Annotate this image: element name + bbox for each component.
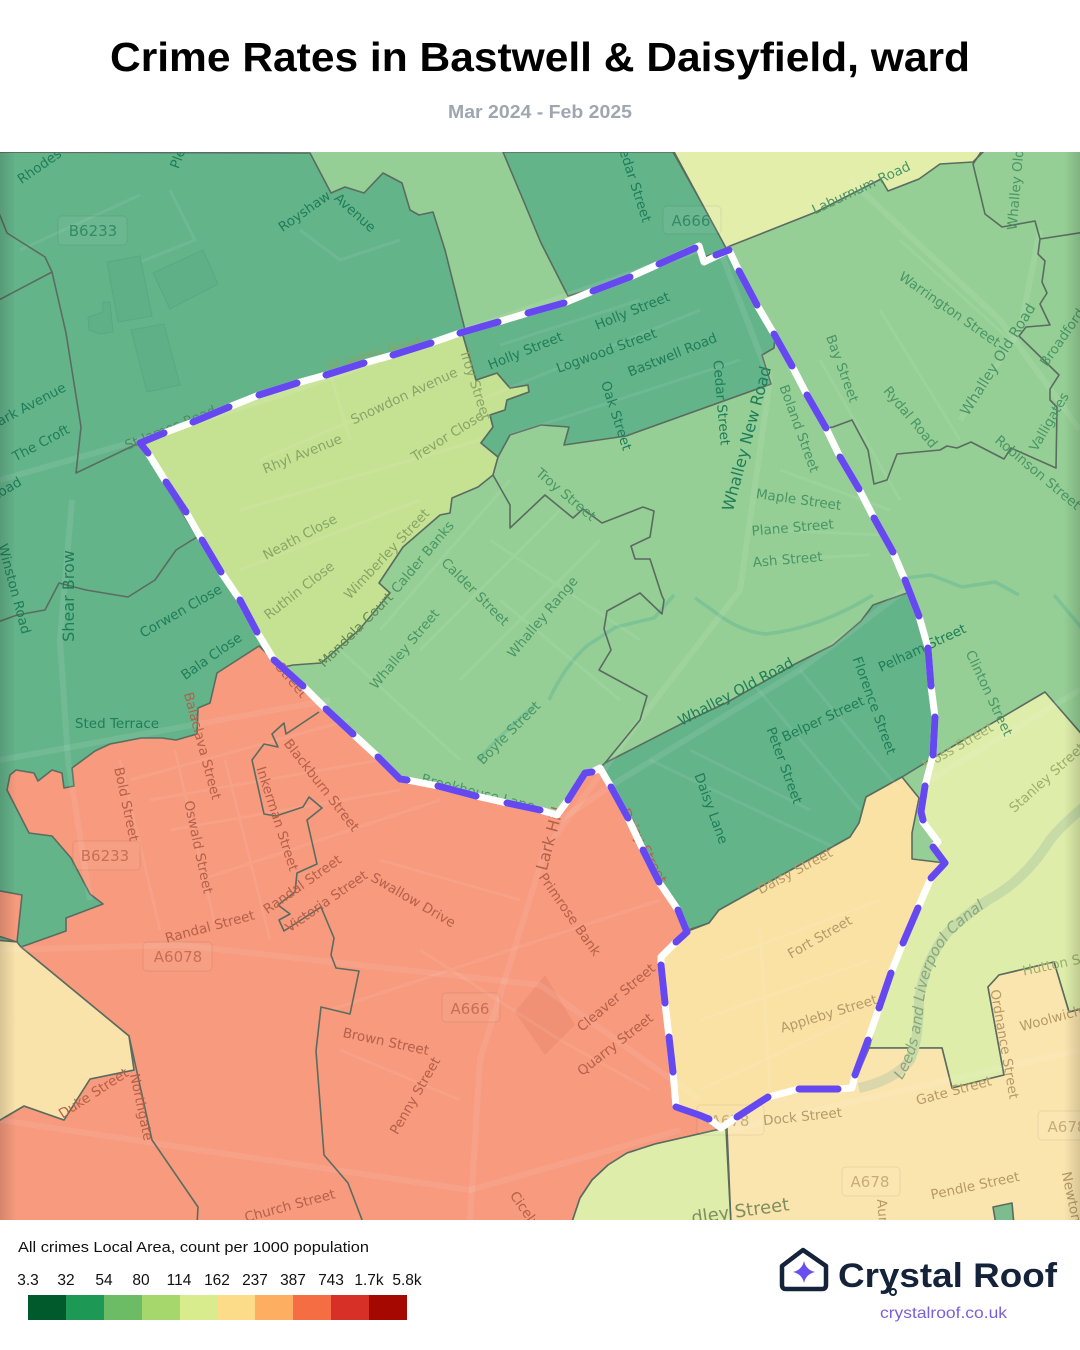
street labels: light green areas (367, 148, 1080, 815)
street labels: salmon area: Randal Street (261, 852, 345, 918)
street labels: dark green areas: Cedar Street (709, 359, 733, 446)
street labels: salmon area: Penny Street (387, 1055, 444, 1137)
area: Snowdon yellow-green (139, 332, 529, 668)
street labels: salmon area: Daisy Street (617, 806, 670, 886)
street labels: dark green areas: Holly Street (593, 289, 672, 334)
street labels: light green areas: Maple Street (755, 486, 842, 514)
street labels: light green areas: Rydal Road (880, 383, 940, 451)
street labels: dark green areas: B6233 (69, 222, 117, 240)
street labels: dark green areas: Bala Close (178, 630, 245, 684)
street labels: yellow-green area: St James Road (325, 333, 423, 375)
street labels: dark green areas: Holly Street (486, 329, 565, 374)
street labels: dark green areas: Sted Terrace (75, 716, 159, 732)
street labels: dark green areas: Whalley New Road (718, 364, 775, 513)
street labels: light green areas: Brookhouse Lane (420, 771, 536, 815)
street labels: salmon area: Swallow Drive (368, 870, 458, 931)
street labels: light green areas: Calder Banks (388, 518, 458, 597)
area: Holly Street dark green (462, 248, 775, 457)
area: salmon town centre (0, 646, 721, 1225)
area: north-east pale yellow (673, 150, 985, 248)
legend scale values: 162 (204, 1272, 230, 1289)
canal south edge overlay on tan (859, 1060, 910, 1088)
legend scale values: 54 (95, 1272, 113, 1289)
legend scale values (17, 1272, 422, 1289)
legend scale values: 80 (132, 1272, 150, 1289)
street labels: dark green areas: Corwen Close (137, 582, 225, 642)
street labels: yellow-green area: Snowdon Avenue (348, 365, 460, 428)
street labels: dark green areas: edar Street (615, 147, 654, 224)
road number boxes (58, 206, 1080, 1196)
dark boundary lines (0, 152, 1080, 1225)
street labels: light green areas: Ash Street (752, 549, 823, 571)
website url: crystalroof.co.uk (880, 1305, 1008, 1322)
street labels: light green areas: Warrington Street (896, 269, 1003, 351)
street labels: salmon area: Balaclava Street (180, 690, 224, 801)
legend scale values: 3.3 (17, 1272, 39, 1289)
logo: Crystal Roof (782, 1250, 1058, 1322)
street labels: tan and pale areas (711, 845, 1080, 1224)
street labels: tan and pale areas: Aur (873, 1198, 891, 1223)
street labels: dark green areas: Whalley Old Road (676, 655, 796, 730)
street labels: salmon area: Duke Street (56, 1065, 132, 1122)
street labels: salmon area: Randal Street (164, 908, 256, 947)
street labels: light green areas: Valligates (1026, 390, 1073, 454)
legend scale values: 237 (242, 1272, 268, 1289)
street labels: salmon area: Oswald Street (180, 799, 216, 895)
street labels: light green areas: Boyle Street (474, 698, 544, 768)
area: pale yellow east (869, 692, 1080, 1088)
title: Crime Rates in Bastwell & Daisyfield, ward (110, 34, 970, 80)
street labels: dark green areas: Florence Street (849, 655, 899, 757)
street labels: tan and pale areas: Gate Street (914, 1073, 994, 1109)
street labels: pale areas (659, 724, 1080, 1269)
icon: house with star (782, 1250, 826, 1289)
street labels: pale areas: Leeds and Liverpool Canal (894, 898, 983, 1080)
street labels: tan and pale areas: A678 (851, 1173, 889, 1191)
sports pitches (88, 250, 218, 392)
street labels: salmon area: B6233 (81, 847, 129, 865)
street labels: salmon area: Cicely (506, 1188, 542, 1231)
street labels: light green areas: Whalley Old (1005, 148, 1028, 231)
street labels: tan and pale areas: A678 (711, 1112, 749, 1130)
area: Daisy Lane dark green (600, 593, 935, 930)
street labels: light green areas: Whalley Old Road (958, 301, 1039, 418)
street labels: salmon area: Victoria Street (283, 867, 371, 936)
ward boundary: Bastwell & Daisyfield (140, 246, 945, 1128)
street labels: tan and pale areas: Fort Street (785, 913, 855, 962)
street labels: salmon area: Street (272, 660, 310, 701)
street labels: dark green areas: Royshaw (276, 188, 334, 235)
street labels: dark green areas: Peter Street (762, 725, 805, 806)
area: salmon west sliver (0, 890, 22, 942)
street labels: pale areas: dley Street (690, 1194, 791, 1229)
subtitle: date range: Mar 2024 - Feb 2025 (448, 101, 632, 122)
area: small green park south-east (992, 1202, 1014, 1220)
area: north-west dark green (0, 152, 465, 960)
street labels: yellow-green area: Rhyl Avenue (261, 431, 344, 477)
street labels: tan and pale areas: Dock Street (762, 1105, 843, 1129)
street labels: salmon area: A6078 (154, 948, 202, 966)
street labels: light green areas: Troy Street (532, 465, 599, 525)
street labels: tan and pale areas: Ordnance Street (986, 988, 1021, 1100)
street labels: light green areas: Clinton Street (962, 648, 1016, 739)
legend scale values: 5.8k (392, 1272, 422, 1289)
street labels: yellow-green area (123, 333, 494, 671)
street labels: salmon area: Church Street (243, 1186, 337, 1226)
street labels: salmon area: Primrose Bank (535, 870, 604, 959)
wordmark y-descender ring (890, 1289, 896, 1295)
wordmark: Crystal Roof (838, 1257, 1058, 1295)
street labels: dark green areas: Shear Brow (59, 550, 78, 642)
street labels: tan and pale areas: Daisy Street (755, 845, 835, 898)
legend scale values: 114 (167, 1272, 192, 1289)
street labels: dark green areas: Daisy Lane (691, 771, 731, 846)
canal (859, 806, 1080, 1088)
street labels: salmon area: Cleaver Street (574, 961, 659, 1035)
street labels: dark green areas: Oak Street (597, 379, 635, 452)
legend scale values: 743 (318, 1272, 344, 1289)
street labels: dark green areas: Bastwell Road (626, 330, 719, 380)
area: tan south-east (721, 962, 1080, 1225)
legend title: All crimes Local Area, count per 1000 population (18, 1239, 369, 1256)
streams (478, 575, 1080, 760)
boundary: white line (140, 246, 945, 1128)
street labels: salmon area: Inkerman Street (252, 765, 301, 873)
street labels: salmon area: Lark Hill (532, 805, 567, 872)
street labels: light green areas: Boland Street (776, 383, 822, 475)
legend scale values: 387 (280, 1272, 306, 1289)
area: pale yellow south (571, 1129, 731, 1225)
street labels: yellow-green area: Ruthin Close (261, 559, 338, 623)
street labels: yellow-green area: Trevor Close (408, 408, 487, 466)
legend scale values: 32 (57, 1272, 75, 1289)
street labels: yellow-green area: Wimberley Street (341, 506, 433, 603)
map edge shading (0, 152, 1080, 1220)
street labels: salmon area: Brown Street (341, 1025, 430, 1059)
street labels: yellow-green area: Troy Street (456, 347, 494, 422)
street labels: light green areas: Whalley Street (367, 606, 443, 693)
street labels: yellow-green area: St James Road (123, 403, 219, 454)
street labels: dark green areas: Ple (167, 146, 189, 171)
street labels: dark green areas: A666 (672, 212, 710, 230)
area: north dark green (503, 152, 728, 296)
area: building in town centre (515, 975, 575, 1055)
road network (0, 180, 1080, 1220)
street labels: dark green areas (0, 146, 969, 846)
street labels: dark green areas: Avenue (331, 190, 379, 236)
street labels: dark green areas: Logwood Street (554, 326, 659, 377)
area: tan ward south (661, 777, 945, 1128)
street labels: tan and pale areas: Pendle Street (929, 1169, 1021, 1203)
base: light green areas (264, 152, 1080, 862)
street labels: pale areas: Moss Street (920, 720, 996, 773)
street labels: yellow-green area: Neath Close (260, 511, 340, 564)
street labels: light green areas: Laburnum Road (810, 159, 913, 218)
street labels: salmon area: Blackburn Street (280, 736, 362, 835)
legend scale values: 1.7k (354, 1272, 384, 1289)
boundary: purple dashes (140, 248, 945, 1119)
area: tan west (0, 940, 134, 1123)
street labels: tan and pale areas: Appleby Street (779, 992, 879, 1036)
street labels: dark green areas: Belper Street (780, 693, 867, 745)
street labels: salmon area: Northgate (126, 1072, 156, 1142)
street labels: light green areas: Whalley Range (504, 574, 582, 661)
street labels: dark green areas: Pelham Street (876, 621, 969, 676)
street labels: yellow-green area: Mandela Court (316, 590, 397, 671)
street labels: dark green areas: The Croft (9, 422, 72, 466)
street labels: salmon area: A666 (451, 1000, 489, 1018)
street labels: salmon area (56, 660, 670, 1231)
street labels: salmon area: Bold Street (110, 766, 142, 843)
street labels: dark green areas: Rhodes (15, 146, 65, 188)
street labels: light green areas: Calder Street (438, 555, 512, 629)
legend colour bar (28, 1295, 407, 1320)
street labels: salmon area: Quarry Street (575, 1010, 657, 1079)
legend (17, 1239, 422, 1320)
street labels: light green areas: Plane Street (751, 516, 834, 540)
street labels: light green areas: Bay Street (822, 333, 861, 405)
